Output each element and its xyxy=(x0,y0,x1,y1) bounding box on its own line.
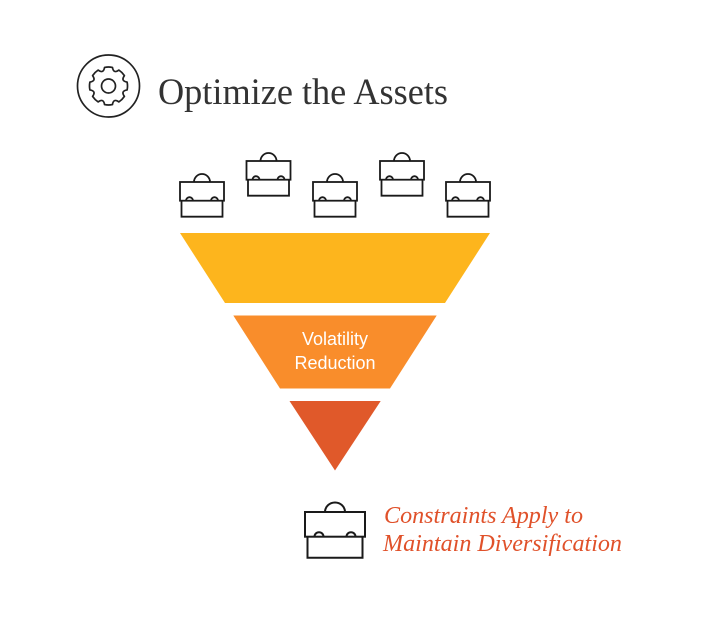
title: Optimize the Assets xyxy=(158,72,448,113)
icon: gear in circle xyxy=(78,55,140,117)
callout: constraints: Maintain Diversification xyxy=(382,531,622,557)
funnel tier: yellow xyxy=(180,233,490,303)
icon: briefcase 2 xyxy=(246,153,290,196)
icon: large briefcase xyxy=(305,502,365,558)
icon: briefcase 4 xyxy=(380,153,424,196)
label: Volatility Reduction: Reduction xyxy=(294,353,376,373)
label: Volatility Reduction: Volatility xyxy=(302,329,368,349)
icon: briefcase 1 xyxy=(180,174,224,217)
callout: constraints: Constraints Apply to xyxy=(384,503,583,529)
icon: briefcase 3 xyxy=(313,174,357,217)
callout: constraints xyxy=(382,503,622,557)
icon: briefcase 5 xyxy=(446,174,490,217)
funnel tier: red xyxy=(290,401,381,470)
label: Volatility Reduction xyxy=(294,329,376,373)
funnel tier: orange xyxy=(233,316,437,388)
